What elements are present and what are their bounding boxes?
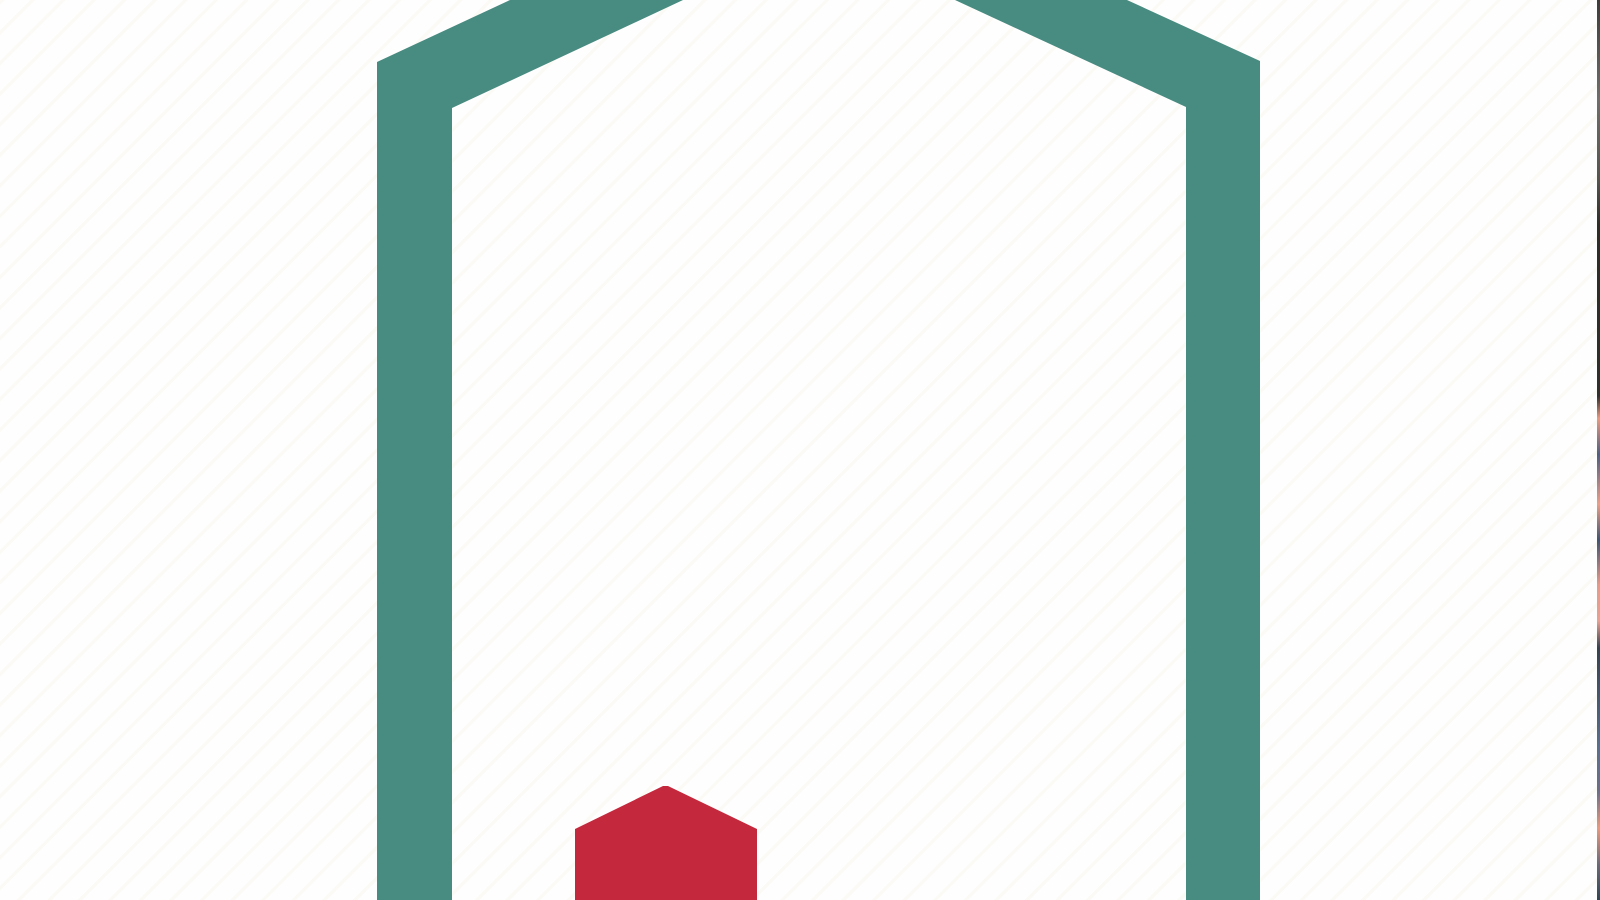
right edge strip	[1597, 0, 1600, 900]
red hexagonal marker	[575, 786, 757, 900]
teal hexagonal outline	[377, 0, 683, 900]
